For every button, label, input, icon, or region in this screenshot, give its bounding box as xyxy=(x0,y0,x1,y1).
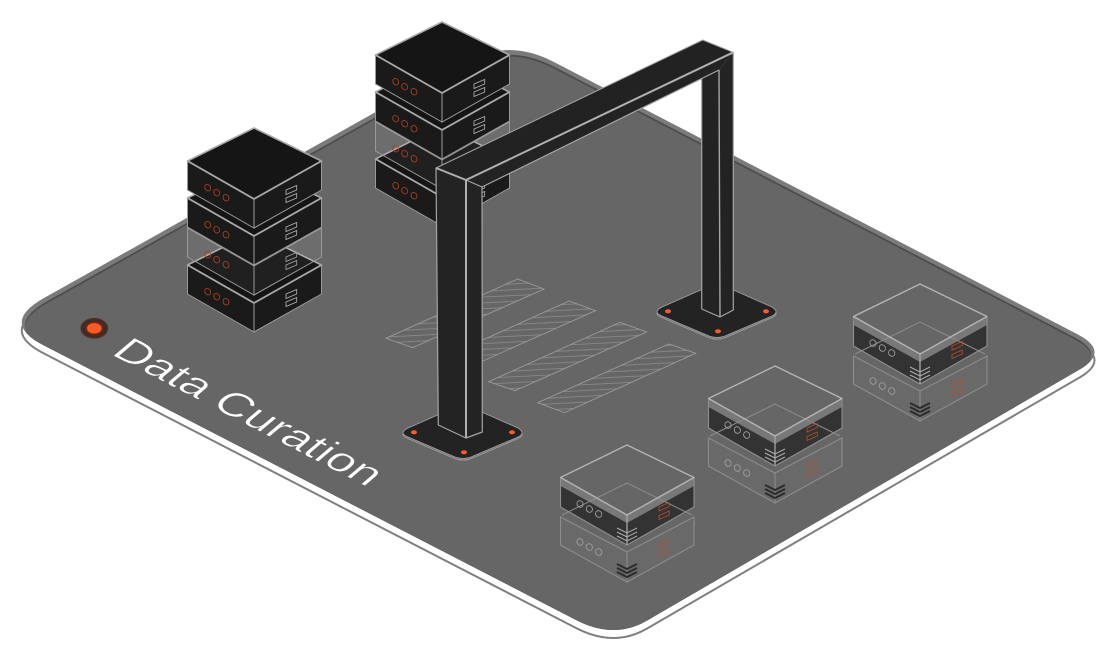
server stack rear xyxy=(376,22,510,226)
glass server: right xyxy=(854,284,987,421)
status indicator dot xyxy=(80,318,108,339)
glass server: middle xyxy=(708,366,842,503)
horizontal beam xyxy=(436,40,733,187)
glass server: front xyxy=(560,445,694,582)
right pillar xyxy=(702,52,733,317)
base plate: right pillar xyxy=(657,285,776,339)
title: Data Curation: Data Curation xyxy=(103,331,395,493)
server stack left xyxy=(188,128,322,332)
left pillar xyxy=(436,168,482,438)
gantry frame xyxy=(436,40,733,438)
base plate: left pillar xyxy=(403,406,522,460)
hatched floor strips xyxy=(386,279,696,413)
